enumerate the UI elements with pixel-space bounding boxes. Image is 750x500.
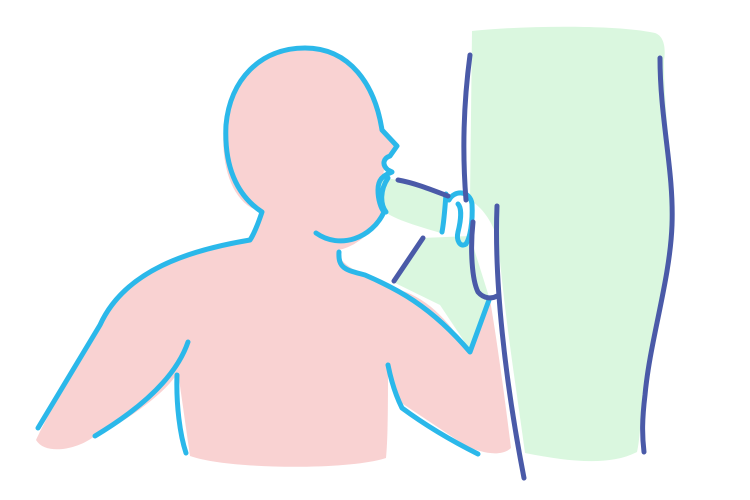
- figure: standing, green fill: [393, 27, 674, 461]
- outline: left torso: [177, 375, 186, 453]
- outline: standing figure: [394, 55, 672, 478]
- object: green shaft: [377, 178, 448, 234]
- figure: kneeling, pink fill: [36, 48, 511, 467]
- outline: right torso: [388, 365, 478, 454]
- outline: head and back: [38, 48, 397, 428]
- outline: object and hand: [382, 178, 472, 245]
- outline: chest and right arm: [339, 252, 489, 352]
- outline: left arm inner: [95, 342, 188, 436]
